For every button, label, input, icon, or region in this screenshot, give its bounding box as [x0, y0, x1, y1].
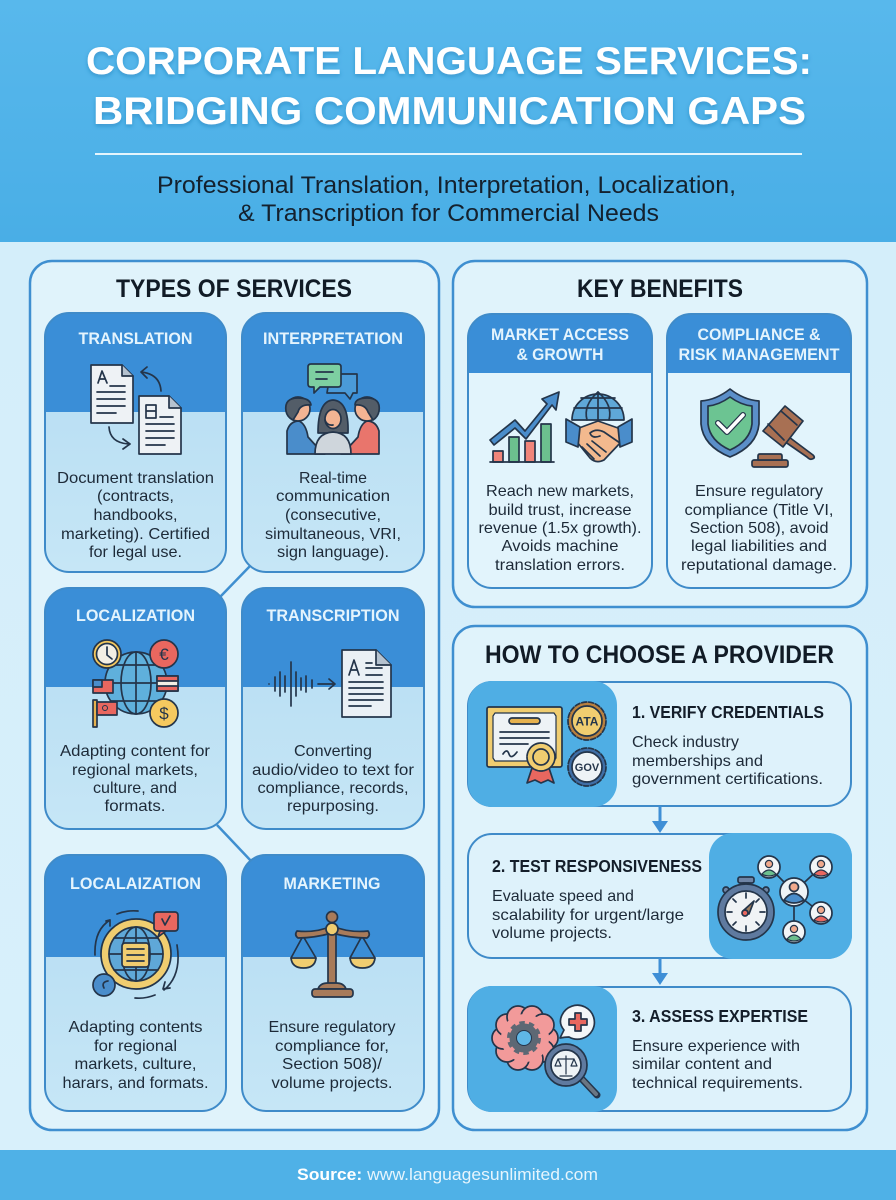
header banner: [0, 0, 896, 242]
text: market access description: translation errors.: [495, 557, 625, 574]
card: market access and growth: [468, 314, 652, 588]
icon: document translation: [91, 365, 181, 454]
card: transcription: [242, 588, 424, 829]
card: localaization: [45, 855, 226, 1111]
step 1: verify credentials: 1. VERIFY CREDENTIALS: [632, 702, 824, 722]
text: test responsiveness description: scalability for urgent/large: [492, 907, 684, 924]
arrow: step 1 to step 2: [652, 806, 668, 833]
card: localization: LOCALIZATION: [76, 607, 195, 625]
text: test responsiveness description: volume projects.: [492, 925, 612, 942]
text: interpretation description: (consecutive,: [285, 507, 381, 524]
arrow: step 2 to step 3: [652, 958, 668, 985]
text: localaization description: for regional: [94, 1038, 177, 1055]
text: compliance description: Section 508), avoid: [690, 520, 828, 537]
text: verify credentials description: government certifications.: [632, 771, 823, 788]
subtitle: [157, 172, 736, 227]
icon: growth chart and handshake: [490, 392, 632, 462]
title: BRIDGING COMMUNICATION GAPS: [93, 90, 806, 133]
icon: certificate and badges: GOV: [575, 762, 600, 774]
icon: audio wave to document: [269, 650, 391, 717]
card: market access and growth: MARKET ACCESS: [491, 326, 629, 344]
icon: globe, currencies and flags: €: [159, 645, 169, 664]
text: market access description: Reach new markets,: [486, 483, 634, 500]
text: translation description: marketing). Certified: [61, 526, 210, 543]
icon: scales of justice: [291, 912, 375, 997]
card: compliance and risk management: [667, 314, 851, 588]
panel: how to choose a provider: [453, 626, 867, 1130]
text: interpretation description: communication: [276, 488, 390, 505]
text: interpretation description: [265, 470, 401, 561]
icon: globe, currencies and flags: [93, 640, 178, 727]
footer: [0, 1150, 896, 1200]
step 3: assess expertise: 3. ASSESS EXPERTISE: [632, 1006, 808, 1026]
text: interpretation description: Real-time: [299, 470, 367, 487]
icon: certificate and badges: ATA: [576, 714, 599, 728]
title: [86, 40, 812, 133]
text: localaization description: harars, and formats.: [62, 1075, 208, 1092]
text: localization description: Adapting content for: [60, 743, 211, 760]
text: localaization description: Adapting contents: [68, 1019, 202, 1036]
text: assess expertise description: technical requirements.: [632, 1075, 803, 1092]
card: localization: [45, 588, 226, 829]
text: test responsiveness description: Evaluate speed and: [492, 888, 634, 905]
icon: globe ring with cycle arrows: [93, 911, 178, 998]
text: assess expertise description: Ensure experience with: [632, 1038, 800, 1055]
text: compliance description: [681, 483, 837, 574]
text: localization description: formats.: [104, 798, 166, 815]
text: assess expertise description: similar content and: [632, 1056, 772, 1073]
heading: how to choose a provider: HOW TO CHOOSE A PROVIDER: [485, 641, 834, 669]
heading: types of services: TYPES OF SERVICES: [116, 275, 352, 303]
text: verify credentials description: Check industry: [632, 734, 739, 751]
text: transcription description: compliance, records,: [258, 780, 408, 797]
text: compliance description: Ensure regulatory: [695, 483, 823, 500]
card: marketing: MARKETING: [284, 875, 380, 893]
text: transcription description: [252, 743, 415, 815]
text: market access description: revenue (1.5x growth).: [478, 520, 642, 537]
icon: globe, currencies and flags: $: [159, 704, 169, 723]
subtitle: & Transcription for Commercial Needs: [238, 200, 659, 227]
card: market access and growth: & GROWTH: [516, 346, 604, 364]
text: interpretation description: simultaneous, VRI,: [265, 526, 401, 543]
text: compliance description: compliance (Title VI,: [684, 502, 834, 519]
icon: interpreter with two people: [286, 364, 379, 454]
panel: key benefits: [453, 261, 867, 607]
text: translation description: handbooks,: [94, 507, 178, 524]
card: marketing: [242, 855, 424, 1111]
text: translation description: [57, 470, 214, 561]
text: translation description: for legal use.: [89, 544, 182, 561]
text: verify credentials description: [632, 734, 823, 788]
card: localaization: LOCALAIZATION: [70, 875, 201, 893]
step 1: verify credentials: [468, 681, 851, 807]
icon: brain, gear and magnifier: [492, 1005, 597, 1095]
text: localaization description: markets, culture,: [74, 1056, 196, 1073]
text: marketing description: Ensure regulatory: [268, 1019, 396, 1036]
text: market access description: build trust, increase: [488, 502, 632, 519]
text: marketing description: Section 508)/: [282, 1056, 383, 1073]
text: localaization description: [62, 1019, 208, 1092]
card: compliance and risk management: COMPLIANCE &: [698, 326, 821, 344]
card: compliance and risk management: RISK MANAGEMENT: [678, 346, 840, 364]
text: translation description: (contracts,: [97, 488, 174, 505]
text: market access description: [478, 483, 642, 574]
step 2: test responsiveness: [468, 833, 852, 959]
text: transcription description: audio/video to text for: [252, 762, 415, 779]
icon: certificate and badges: [487, 702, 606, 786]
text: assess expertise description: [632, 1038, 803, 1092]
text: marketing description: compliance for,: [275, 1038, 389, 1055]
text: marketing description: [268, 1019, 396, 1092]
title: CORPORATE LANGUAGE SERVICES:: [86, 40, 812, 83]
card: interpretation: [242, 313, 424, 572]
text: localization description: culture, and: [93, 780, 177, 797]
text: translation description: Document translation: [57, 470, 214, 487]
step 2: test responsiveness: 2. TEST RESPONSIVENESS: [492, 856, 702, 876]
text: transcription description: repurposing.: [287, 798, 379, 815]
card: translation: [45, 313, 226, 572]
text: localization description: regional markets,: [72, 762, 198, 779]
text: marketing description: volume projects.: [272, 1075, 392, 1092]
icon: shield and gavel: [701, 389, 814, 467]
text: localization description: [60, 743, 211, 815]
card: transcription: TRANSCRIPTION: [266, 607, 400, 625]
step 3: assess expertise: [468, 986, 851, 1112]
panel: types of services: [30, 261, 439, 1130]
text: interpretation description: sign language).: [277, 544, 389, 561]
text: verify credentials description: memberships and: [632, 753, 763, 770]
card: interpretation: INTERPRETATION: [263, 330, 403, 348]
subtitle: Professional Translation, Interpretation, Localization,: [157, 172, 736, 199]
text: test responsiveness description: [492, 888, 684, 942]
text: compliance description: reputational damage.: [681, 557, 837, 574]
card: translation: TRANSLATION: [78, 330, 192, 348]
text: compliance description: legal liabilities and: [691, 538, 827, 555]
text: transcription description: Converting: [294, 743, 372, 760]
text: market access description: Avoids machine: [502, 538, 619, 555]
icon: stopwatch and network: [718, 856, 832, 943]
heading: key benefits: KEY BENEFITS: [577, 275, 743, 303]
footer: Source: www.languagesunlimited.com: [297, 1166, 598, 1184]
